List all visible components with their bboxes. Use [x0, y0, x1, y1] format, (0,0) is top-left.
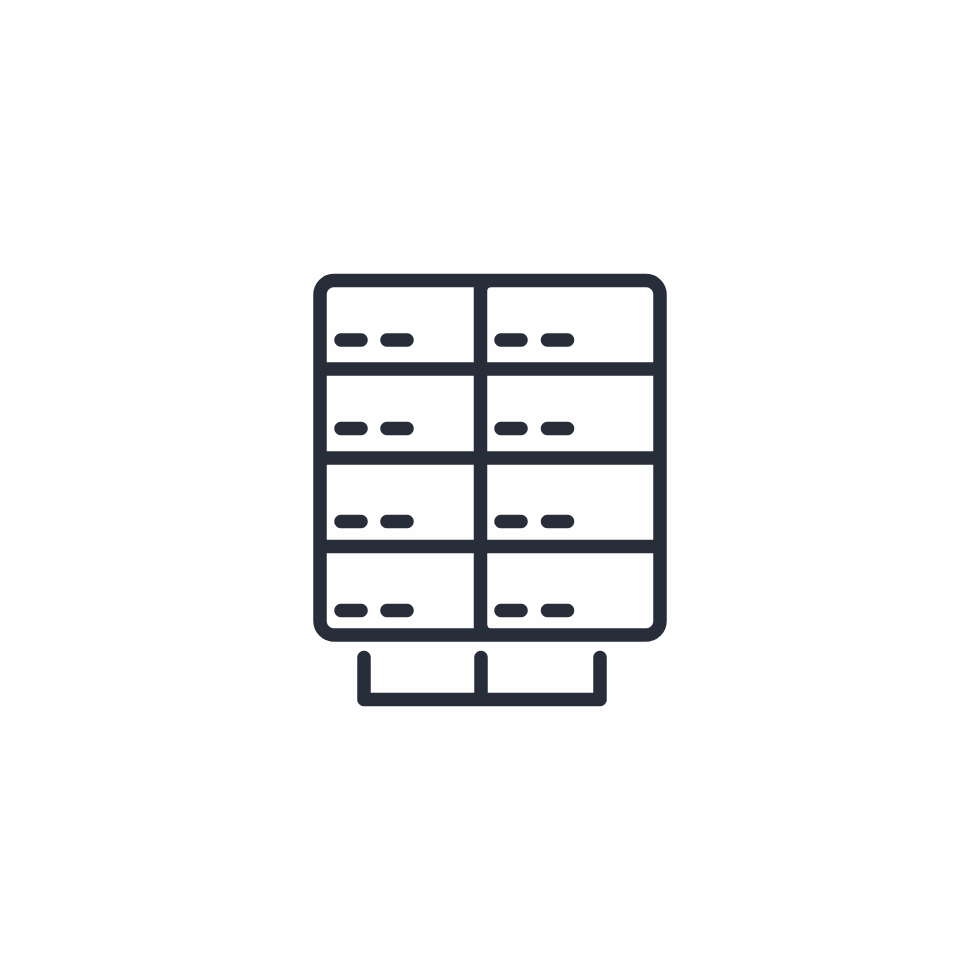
stand [364, 658, 600, 700]
inner corner fillets beside the centre divider [487, 287, 492, 628]
cabinet dividers [320, 280, 660, 635]
cabinet frame [320, 280, 660, 635]
drawer handles [341, 340, 568, 610]
